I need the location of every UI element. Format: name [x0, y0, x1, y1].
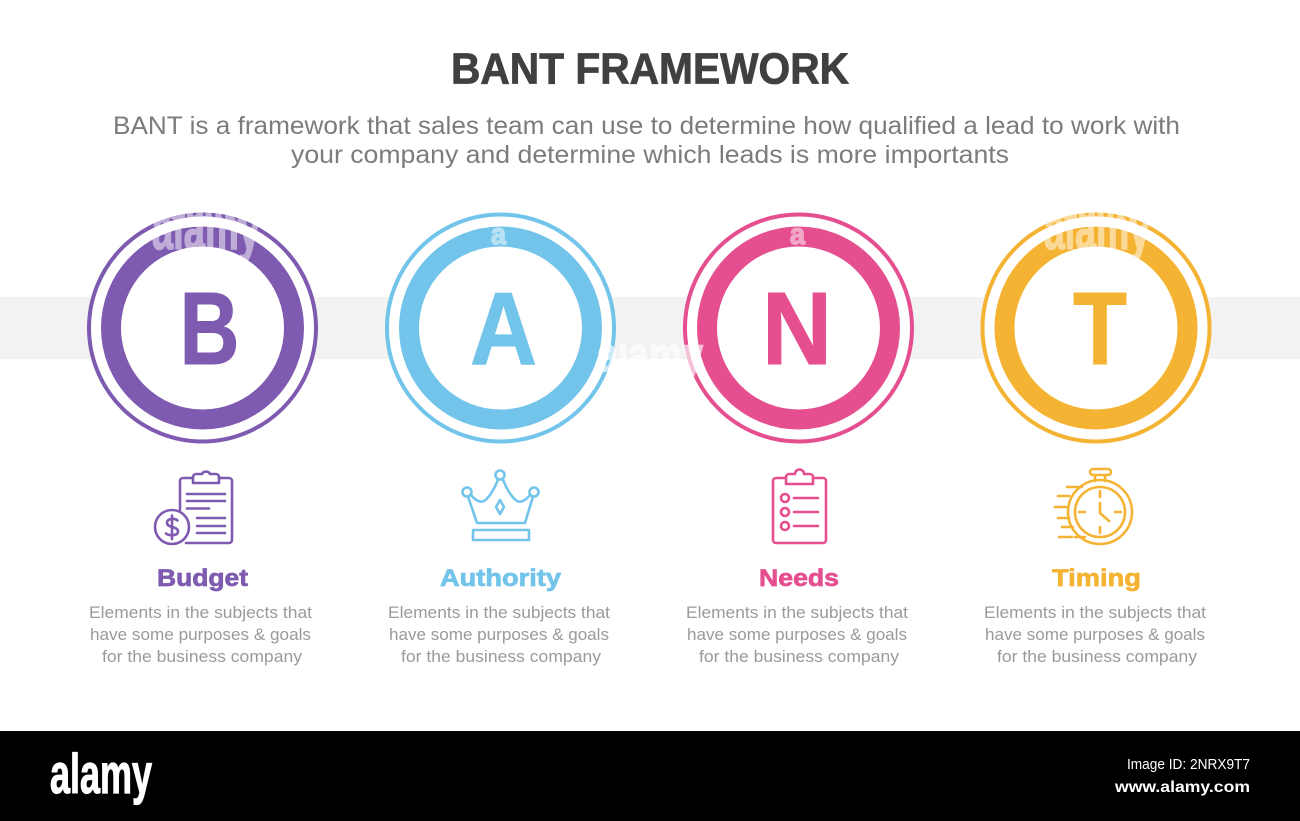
- text block: Authority: for the business company: [401, 647, 602, 666]
- subtitle: your company and determine which leads is more importants: [291, 141, 1009, 169]
- circle: B: [89, 214, 316, 442]
- text block: Timing: [984, 603, 1206, 666]
- background band: [0, 297, 1300, 359]
- text block: Timing: have some purposes & goals: [985, 625, 1205, 644]
- footer bar: Image ID: 2NRX9T7: [1127, 756, 1250, 773]
- text block: Budget: [89, 603, 312, 666]
- text block: Authority: [388, 603, 610, 666]
- watermark fragments: alamy: [1052, 193, 1142, 226]
- circle: A: A: [470, 271, 537, 386]
- text block: Needs: have some purposes & goals: [687, 625, 907, 644]
- subtitle: BANT is a framework that sales team can use to determine how qualified a lead to work with: [113, 112, 1180, 140]
- footer bar: [0, 731, 1300, 821]
- watermark fragments: a: [491, 218, 506, 251]
- circle: B: B: [180, 271, 240, 386]
- watermark on band: alamy: [597, 329, 703, 382]
- circle: N: [685, 214, 912, 442]
- text block: Needs: [686, 603, 908, 666]
- heading: Needs: Needs: [759, 565, 839, 592]
- heading: Authority: Authority: [440, 565, 562, 592]
- icon: needs checklist: [773, 470, 826, 543]
- footer bar: alamy: [50, 742, 152, 805]
- text block: Timing: for the business company: [997, 647, 1198, 666]
- subtitle: [113, 112, 1180, 169]
- text block: Budget: have some purposes & goals: [90, 625, 311, 644]
- circle: T: [982, 214, 1210, 442]
- heading: Timing: Timing: [1052, 565, 1141, 592]
- circle: A: [387, 214, 614, 442]
- heading: Budget: Budget: [157, 565, 248, 592]
- text block: Authority: Elements in the subjects that: [388, 603, 610, 622]
- icon: budget clipboard: [155, 472, 232, 544]
- watermark fragments: alamy: [1044, 195, 1150, 262]
- text block: Timing: Elements in the subjects that: [984, 603, 1206, 622]
- icon: authority crown: [462, 470, 538, 540]
- title: BANT FRAMEWORK: [451, 46, 850, 94]
- text block: Budget: Elements in the subjects that: [89, 603, 312, 622]
- text block: Authority: have some purposes & goals: [389, 625, 609, 644]
- watermark fragments: a: [790, 218, 805, 251]
- watermark fragments: [152, 193, 1150, 262]
- circle: T: T: [1073, 271, 1127, 386]
- watermark fragments: alamy: [152, 195, 260, 262]
- footer bar: www.alamy.com: [1114, 779, 1250, 796]
- circle: N: N: [762, 271, 832, 386]
- icon: timing stopwatch: [1055, 469, 1132, 544]
- watermark fragments: alamy: [160, 193, 250, 226]
- text block: Needs: Elements in the subjects that: [686, 603, 908, 622]
- text block: Budget: for the business company: [102, 647, 303, 666]
- text block: Needs: for the business company: [699, 647, 900, 666]
